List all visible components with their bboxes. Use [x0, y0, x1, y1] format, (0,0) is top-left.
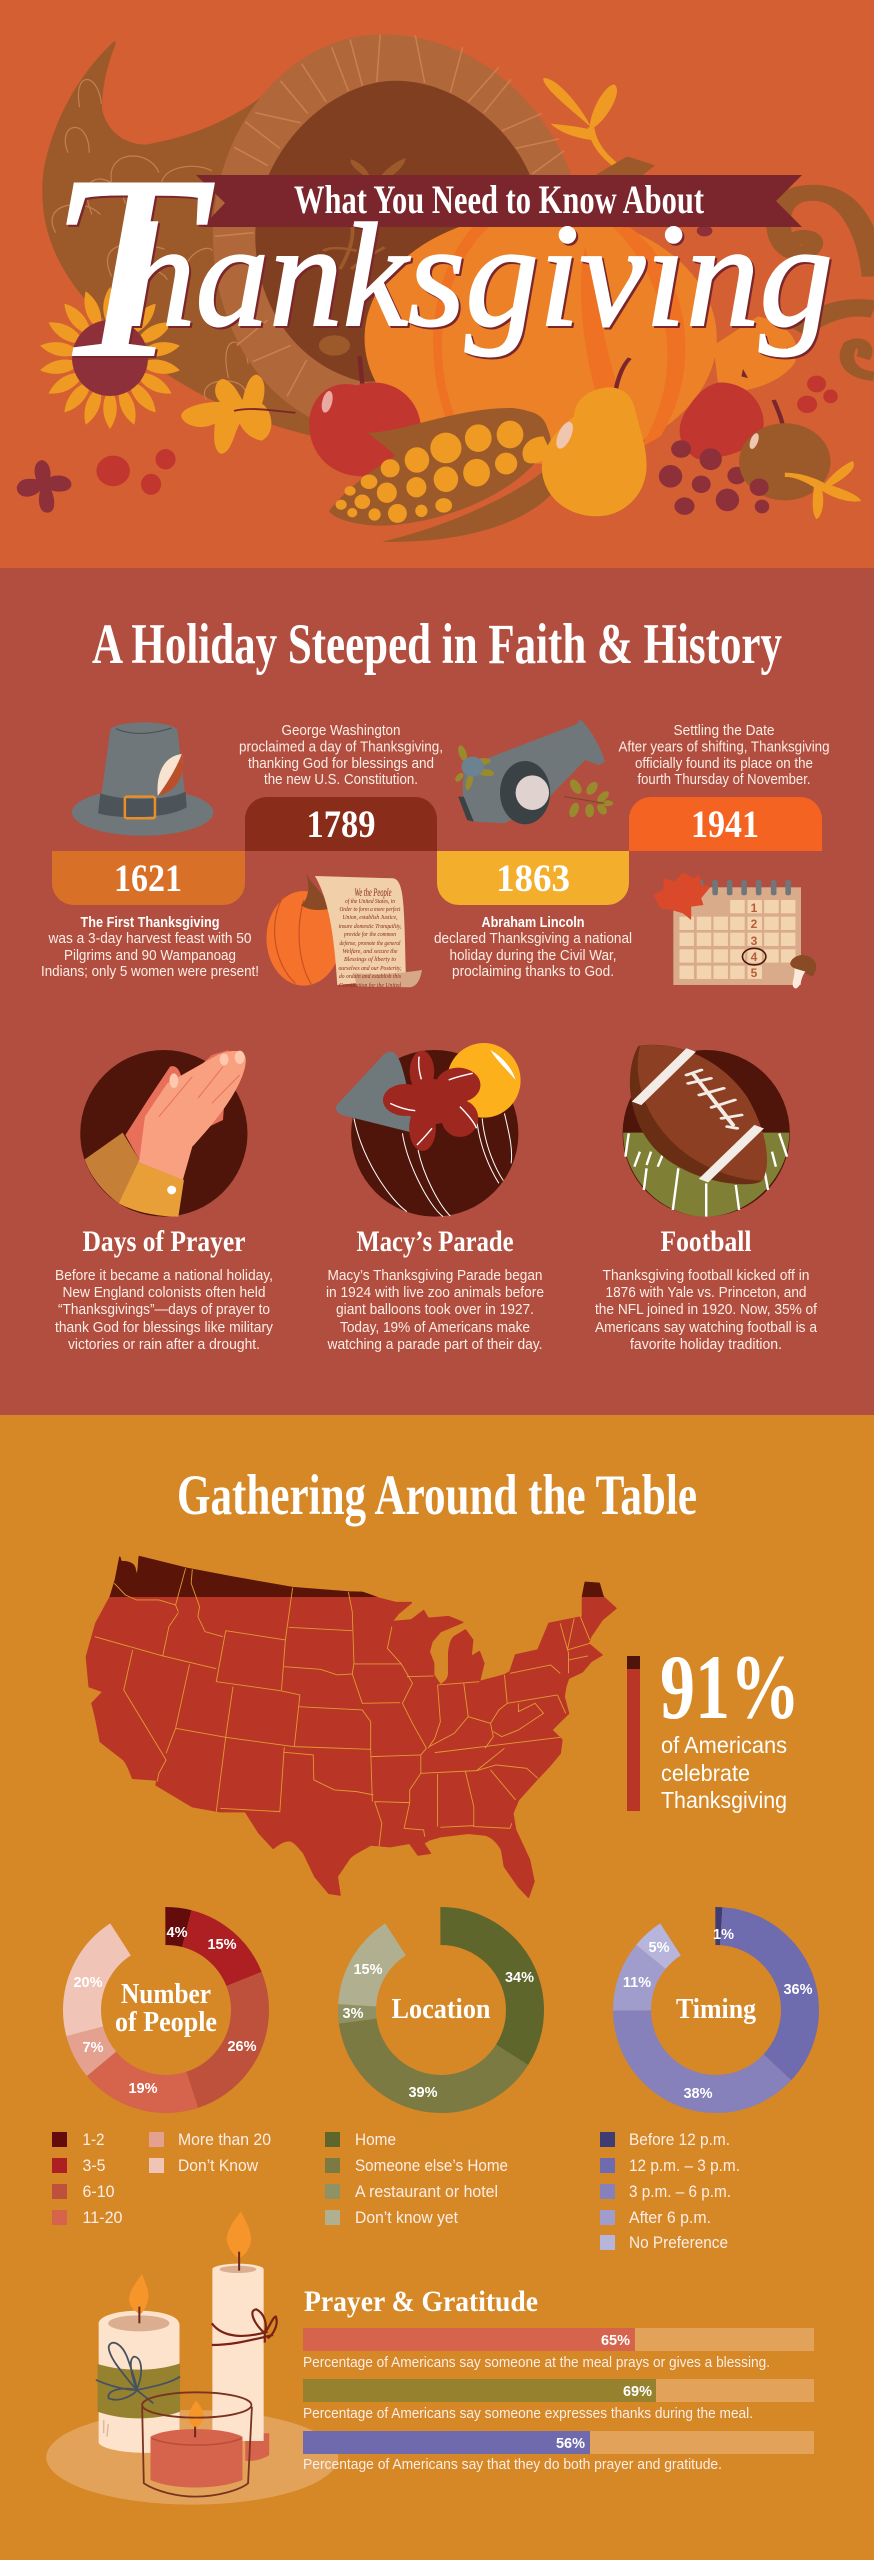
icon: pumpkin with scroll: [266, 873, 422, 987]
card: Days of Prayer: victories or rain after a drought.: [68, 1336, 260, 1353]
bar chart: blessing: Percentage of Americans say someone at the meal prays or gives a blessing.: [303, 2354, 770, 2371]
text: George Washington: [239, 722, 443, 788]
timeline bars: 1789: [306, 803, 376, 846]
scroll text: of the United States, in: [345, 898, 395, 905]
legend: number of people: More than 20: [178, 2130, 271, 2149]
donut chart: number of people: of People: [115, 2007, 217, 2038]
card: Football: 1876 with Yale vs. Princeton, and: [606, 1284, 806, 1301]
card: Football: Americans say watching football is a: [595, 1319, 818, 1336]
donut chart: location: Location: [392, 1994, 491, 2025]
text: The First Thanksgiving: Indians; only 5 women were present!: [41, 963, 259, 980]
text: The First Thanksgiving: The First Thanksgiving: [80, 914, 220, 931]
text: George Washington: the new U.S. Constitution.: [264, 771, 418, 788]
icon: cannon: [453, 719, 613, 824]
card: Macy's Parade: in 1924 with live zoo animals before: [326, 1284, 544, 1301]
text: Abraham Lincoln: holiday during the Civil War,: [450, 947, 616, 964]
calendar numbers: [751, 901, 758, 980]
bar chart: both: Percentage of Americans say that they do both prayer and gratitude.: [303, 2456, 722, 2473]
calendar numbers: 5: [751, 966, 758, 980]
bar chart: blessing: 65%: [601, 2333, 630, 2349]
timeline bars: 1863: [496, 857, 570, 900]
stat: 91%: celebrate: [661, 1760, 750, 1786]
map: United States: [86, 1557, 616, 1897]
donut chart: timing: [623, 1926, 813, 2102]
card: Football: [595, 1225, 818, 1353]
legend: timing: 12 p.m. – 3 p.m.: [629, 2156, 740, 2175]
legend: timing: 3 p.m. – 6 p.m.: [629, 2182, 731, 2201]
legend: timing: Before 12 p.m.: [629, 2130, 730, 2149]
donut chart: location: 3%: [343, 2006, 364, 2022]
calendar numbers: 2: [751, 917, 758, 931]
donut chart: number of people: 20%: [73, 1975, 103, 1991]
panel: gathering: [0, 1415, 874, 2560]
scroll text: defense, promote the general: [340, 940, 401, 947]
legend: timing: [600, 2130, 740, 2252]
legend: timing: No Preference: [629, 2233, 728, 2252]
icon: football: [623, 1045, 790, 1217]
illustration: leaf sprig and pumpkin stem: [543, 78, 655, 185]
donut chart: number of people: 4%: [167, 1925, 188, 1941]
donut chart: location: 15%: [353, 1962, 383, 1978]
card: Macy's Parade: Today, 19% of Americans make: [340, 1319, 530, 1336]
text: The First Thanksgiving: was a 3-day harvest feast with 50: [48, 930, 252, 947]
legend: timing: After 6 p.m.: [629, 2208, 711, 2227]
legend: number of people: 3-5: [82, 2156, 106, 2175]
legend: location: [325, 2130, 508, 2227]
calendar numbers: 4: [751, 950, 758, 964]
card: Macy's Parade: Macy’s Thanksgiving Parade began: [328, 1267, 542, 1284]
text: George Washington: thanking God for blessings and: [248, 755, 434, 772]
text: Settling the Date: After years of shifting, Thanksgiving: [618, 738, 830, 756]
card: Days of Prayer: Before it became a national holiday,: [55, 1267, 273, 1284]
bar chart: thanks: [303, 2379, 814, 2422]
scroll text: do ordain and establish this: [339, 973, 401, 980]
card: Days of Prayer: thank God for blessings like military: [55, 1319, 273, 1336]
legend: number of people: 6-10: [82, 2182, 114, 2201]
legend: number of people: 11-20: [82, 2208, 122, 2227]
text: Settling the Date: officially found its place on the: [635, 755, 813, 772]
timeline bars: 1621: [114, 857, 182, 900]
donut chart: timing: 1%: [713, 1927, 734, 1943]
icon: parade balloons: [336, 1043, 521, 1217]
donut chart: number of people: 26%: [227, 2039, 257, 2055]
text: The First Thanksgiving: [41, 914, 259, 980]
scroll text: provide for the common: [343, 931, 396, 938]
scroll text: insure domestic Tranquility,: [338, 923, 402, 930]
stat: 91%: Thanksgiving: [661, 1787, 787, 1813]
timeline bars: [52, 797, 822, 905]
donut chart: location: 34%: [505, 1970, 534, 1986]
legend: number of people: Don’t Know: [178, 2156, 259, 2175]
title: Thanksgiving: hanksgiving: [122, 194, 833, 358]
legend: number of people: [52, 2130, 271, 2227]
donut chart: timing: 36%: [783, 1982, 813, 1998]
illustration: large pumpkin: [365, 213, 797, 464]
text: Settling the Date: fourth Thursday of November.: [638, 771, 810, 788]
text: George Washington: George Washington: [282, 722, 400, 739]
panel: holiday history: [0, 568, 874, 1415]
scroll text: Union, establish Justice,: [342, 914, 398, 921]
heading: gathering: Gathering Around the Table: [177, 1464, 697, 1527]
card: Days of Prayer: “Thanksgivings”—days of prayer to: [58, 1301, 270, 1318]
card: Football: the NFL joined in 1920. Now, 35% of: [595, 1301, 818, 1318]
scroll text: Blessings of liberty to: [344, 956, 397, 963]
icon: calendar: [653, 873, 816, 989]
stat: 91%: of Americans: [661, 1732, 787, 1758]
card: Days of Prayer: Days of Prayer: [82, 1225, 246, 1258]
legend: location: Home: [355, 2130, 396, 2149]
text: Abraham Lincoln: declared Thanksgiving a national: [434, 930, 632, 947]
donut chart: number of people: 15%: [207, 1937, 237, 1953]
donut chart: number of people: [73, 1925, 257, 2097]
illustration: cornucopia: [42, 35, 581, 436]
calendar numbers: 3: [751, 934, 758, 948]
legend: number of people: 1-2: [82, 2130, 104, 2149]
bar chart: both: [303, 2431, 814, 2473]
donut chart: number of people: Number: [121, 1979, 211, 2010]
donut chart: location: 39%: [408, 2085, 438, 2101]
calendar numbers: 1: [751, 901, 758, 915]
scroll text: ourselves and our Posterity,: [338, 965, 402, 972]
card: Football: favorite holiday tradition.: [630, 1336, 782, 1353]
text: Abraham Lincoln: Abraham Lincoln: [482, 914, 584, 931]
legend: location: Don’t know yet: [355, 2208, 458, 2227]
card: Football: Football: [660, 1225, 752, 1258]
icon: praying hands: [80, 1050, 247, 1217]
card: Macy's Parade: giant balloons took over in 1927.: [336, 1301, 534, 1318]
stat: 91%: [627, 1636, 800, 1813]
bar chart: thanks: Percentage of Americans say someone expresses thanks during the meal.: [303, 2405, 753, 2422]
card: Days of Prayer: New England colonists often held: [62, 1284, 266, 1301]
timeline bars: 1941: [691, 803, 759, 846]
illustration: vine curls: [778, 193, 874, 376]
stat: 91%: 91%: [660, 1636, 800, 1738]
donut chart: timing: 11%: [623, 1975, 651, 1991]
card: Macy's Parade: [326, 1225, 544, 1353]
illustration: fallen leaves and berries: [17, 375, 861, 519]
bar chart: blessing: [303, 2328, 814, 2371]
donut chart: timing: 5%: [649, 1940, 670, 1956]
card: Days of Prayer: [55, 1225, 273, 1353]
scroll text: Constitution for the United: [339, 982, 402, 989]
text: The First Thanksgiving: Pilgrims and 90 Wampanoag: [64, 947, 236, 964]
title banner: [196, 175, 802, 227]
bar chart: both: 56%: [556, 2436, 585, 2452]
illustration: candles: [46, 2212, 338, 2505]
panel: header: [0, 0, 874, 568]
legend: location: A restaurant or hotel: [355, 2182, 498, 2201]
donut chart: number of people: 7%: [83, 2040, 104, 2056]
scroll text: Order to form a more perfect: [340, 906, 401, 913]
text: George Washington: proclaimed a day of Thanksgiving,: [239, 738, 443, 756]
card: Football: Thanksgiving football kicked off in: [602, 1267, 810, 1284]
text: Abraham Lincoln: proclaiming thanks to God.: [452, 963, 614, 980]
donut chart: number of people: 19%: [128, 2081, 158, 2097]
card: Macy's Parade: Macy’s Parade: [356, 1225, 514, 1258]
text: Settling the Date: Settling the Date: [674, 722, 774, 739]
scroll text: Welfare, and secure the: [342, 948, 398, 955]
text: Abraham Lincoln: [434, 914, 632, 980]
donut chart: timing: Timing: [676, 1994, 756, 2025]
illustration: sunflower: [39, 287, 181, 429]
heading: prayer and gratitude: Prayer & Gratitude: [304, 2285, 538, 2318]
scroll text: [338, 885, 402, 989]
title banner: What You Need to Know About: [294, 177, 705, 222]
donut chart: location: [343, 1926, 534, 2101]
illustration: apples, pear, corn and berries: [309, 225, 831, 542]
text: Settling the Date: [618, 722, 830, 788]
scroll text: We the People: [354, 885, 392, 899]
icon: pilgrim hat: [72, 722, 213, 836]
legend: location: Someone else’s Home: [355, 2156, 508, 2175]
card: Macy's Parade: watching a parade part of their day.: [327, 1336, 542, 1353]
bar chart: thanks: 69%: [623, 2384, 652, 2400]
donut chart: timing: 38%: [683, 2086, 713, 2102]
title: Thanksgiving: T: [50, 122, 216, 412]
